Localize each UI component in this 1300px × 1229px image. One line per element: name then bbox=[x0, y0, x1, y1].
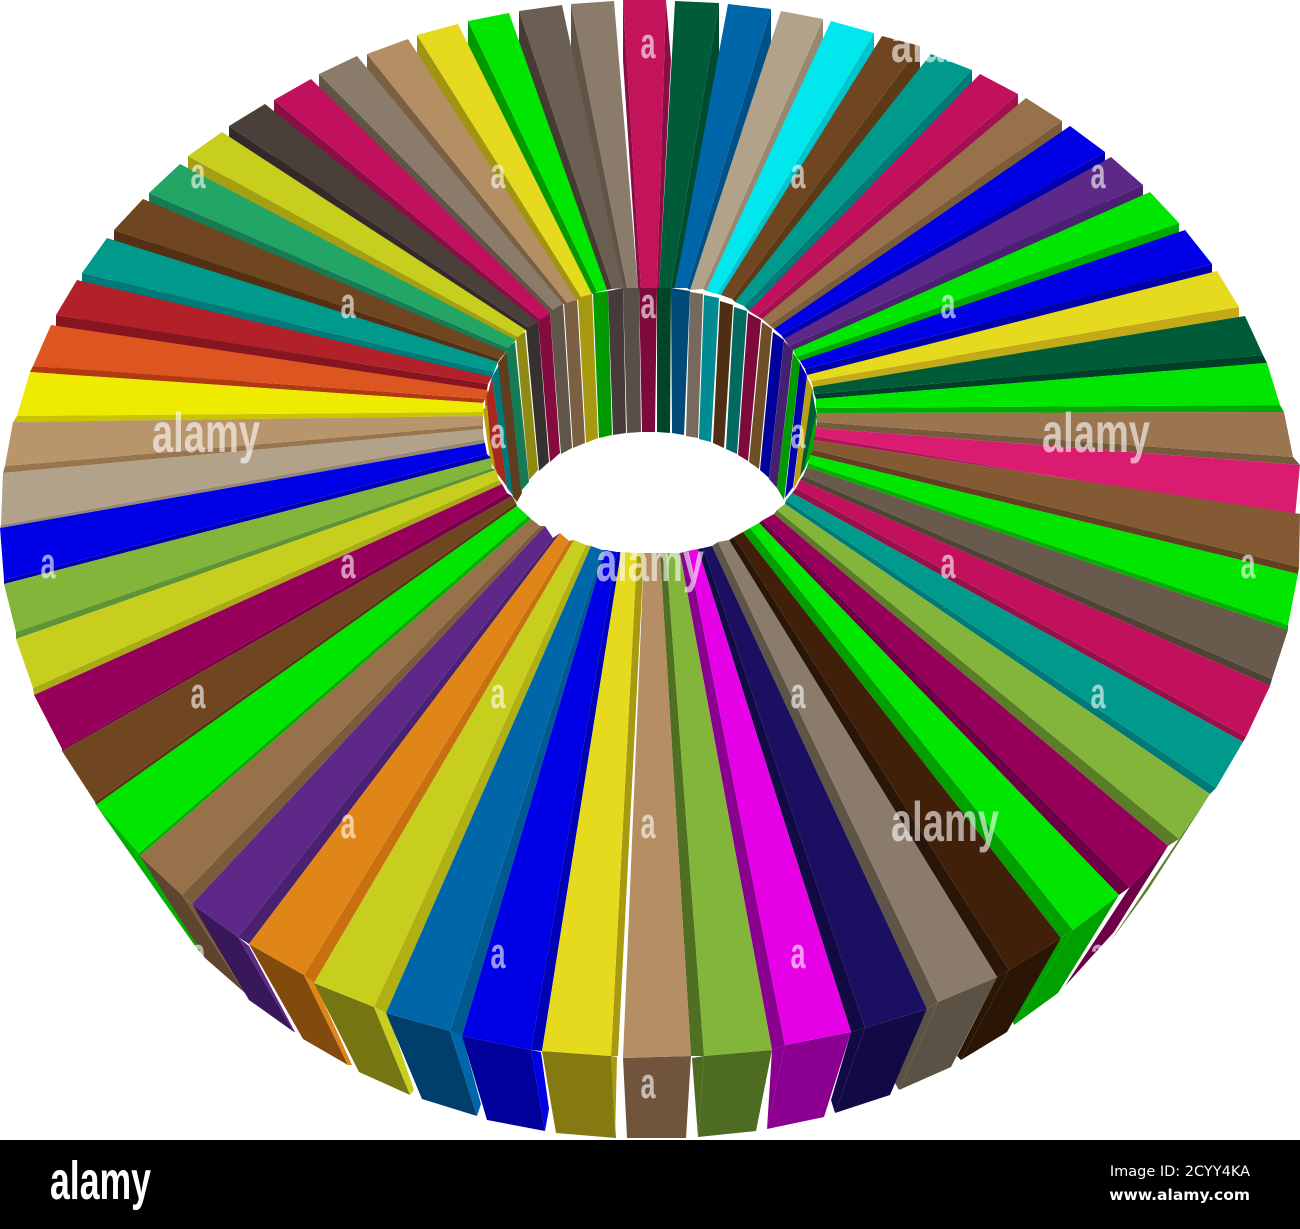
watermark letters: a bbox=[190, 669, 206, 718]
bar: taupe lower right bbox=[712, 540, 997, 1090]
bar: brown upper left bbox=[114, 199, 506, 362]
watermark letters: a bbox=[340, 539, 356, 588]
watermark letters: a bbox=[640, 1059, 656, 1108]
bar: dark green top bbox=[659, 1, 719, 288]
watermark letters: a bbox=[640, 19, 656, 68]
bar: taupe upper left bbox=[319, 56, 563, 313]
watermark letters: a bbox=[490, 669, 506, 718]
watermark letters: a bbox=[40, 539, 56, 588]
image id: Image ID: 2CYY4KA bbox=[1110, 1164, 1250, 1180]
bar: green right lower bbox=[807, 455, 1298, 630]
watermark letters: a bbox=[1090, 929, 1106, 978]
watermark letters: a bbox=[640, 279, 656, 328]
bar: leaf green left bbox=[4, 458, 496, 639]
footer band bbox=[0, 1140, 1300, 1229]
bar: tan left bbox=[3, 416, 483, 473]
watermark words: alamy bbox=[891, 11, 999, 74]
bar: orange red bbox=[30, 325, 487, 403]
bar: crimson top right bbox=[749, 74, 1018, 319]
bar: green lower left bbox=[96, 506, 531, 958]
bar: teal top right bbox=[735, 54, 972, 311]
bar: blue right bbox=[800, 230, 1212, 375]
watermark letters: a bbox=[490, 149, 506, 198]
bar: crimson right bbox=[792, 480, 1270, 742]
bar: yellow bottom bbox=[542, 552, 644, 1138]
bar: light brown upper right bbox=[762, 98, 1062, 329]
bar: green upper right bbox=[793, 192, 1179, 361]
bar: beige left bbox=[0, 429, 485, 528]
watermark words: alamy bbox=[891, 790, 999, 853]
bar: red bbox=[56, 280, 492, 390]
watermark letters: a bbox=[340, 279, 356, 328]
bar: maroon lower right bbox=[759, 514, 1168, 986]
bar: maroon left bbox=[34, 484, 512, 751]
bar: sea green bbox=[149, 164, 516, 352]
watermark letters: a bbox=[790, 409, 806, 458]
watermark letters: a bbox=[490, 409, 506, 458]
watermark letters: a bbox=[190, 149, 206, 198]
bar: blue upper right bbox=[774, 126, 1105, 339]
bar: orange bbox=[249, 533, 574, 1065]
bar: light brown lower left bbox=[140, 519, 545, 993]
bar: pink right bbox=[813, 428, 1300, 517]
watermark letters: a bbox=[940, 539, 956, 588]
watermark letters: a bbox=[340, 799, 356, 848]
bar: dark green right bbox=[813, 316, 1267, 399]
bar: blue top bbox=[675, 4, 771, 290]
watermark letters: a bbox=[490, 929, 506, 978]
bar: green top left bbox=[468, 13, 607, 294]
bar: magenta bbox=[680, 549, 851, 1129]
bar: charcoal bbox=[229, 104, 538, 330]
bar: olive yellow upper left bbox=[188, 132, 526, 340]
website: www.alamy.com bbox=[1109, 1186, 1250, 1204]
watermark words: alamy bbox=[596, 530, 704, 593]
watermark words bbox=[152, 11, 1150, 853]
bar: brown left bbox=[62, 496, 517, 805]
bar: leaf green bottom bbox=[660, 553, 772, 1137]
bar: olive yellow bottom left bbox=[314, 540, 591, 1095]
bar: yellow top left bbox=[417, 24, 592, 300]
watermark words: alamy bbox=[152, 401, 260, 464]
bar: blue bottom bbox=[462, 550, 621, 1131]
bar: steel blue bottom bbox=[386, 546, 605, 1116]
bar: brown right bbox=[810, 440, 1300, 574]
bar: cyan bbox=[706, 21, 874, 295]
bar: tan right bbox=[816, 412, 1300, 465]
bar: brown top right bbox=[721, 36, 920, 302]
bar: tan top left bbox=[367, 39, 577, 304]
watermark letters: a bbox=[940, 279, 956, 328]
bar: purple upper right bbox=[784, 157, 1143, 350]
bar: olive yellow left bbox=[16, 470, 502, 695]
watermark letters: a bbox=[790, 149, 806, 198]
bar: blue left bbox=[0, 443, 491, 584]
bar: purple lower left bbox=[192, 526, 560, 1032]
bar: yellow right bbox=[807, 271, 1239, 387]
bar: grey right bbox=[800, 467, 1288, 686]
bar: dark brown lower right bbox=[729, 532, 1061, 1060]
watermark letters: a bbox=[790, 929, 806, 978]
bar: green right bbox=[816, 363, 1284, 413]
watermark letters: a bbox=[190, 929, 206, 978]
bar: beige top bbox=[690, 11, 823, 291]
footer logo: alamy bbox=[50, 1151, 151, 1211]
bar: leaf green lower right bbox=[774, 504, 1210, 942]
watermark letters: a bbox=[790, 669, 806, 718]
watermark letters: a bbox=[640, 799, 656, 848]
watermark letters: a bbox=[1090, 669, 1106, 718]
bar: crimson upper left bbox=[274, 79, 550, 322]
watermark words: alamy bbox=[1042, 401, 1150, 464]
bar: bright yellow bbox=[13, 372, 483, 422]
inner walls of the ring bbox=[483, 287, 817, 502]
bar: dark taupe bbox=[519, 5, 623, 290]
bar: tan bottom centre bbox=[623, 553, 691, 1138]
bar: top centre crimson bbox=[623, 0, 671, 288]
watermark letters: a bbox=[1090, 149, 1106, 198]
bar: green lower right bbox=[743, 523, 1119, 1025]
bar: teal right bbox=[785, 493, 1243, 794]
watermark letters: a bbox=[1240, 539, 1256, 588]
bar: taupe top bbox=[571, 1, 638, 288]
bar: navy bbox=[698, 546, 927, 1113]
bar: teal left bbox=[82, 238, 498, 377]
